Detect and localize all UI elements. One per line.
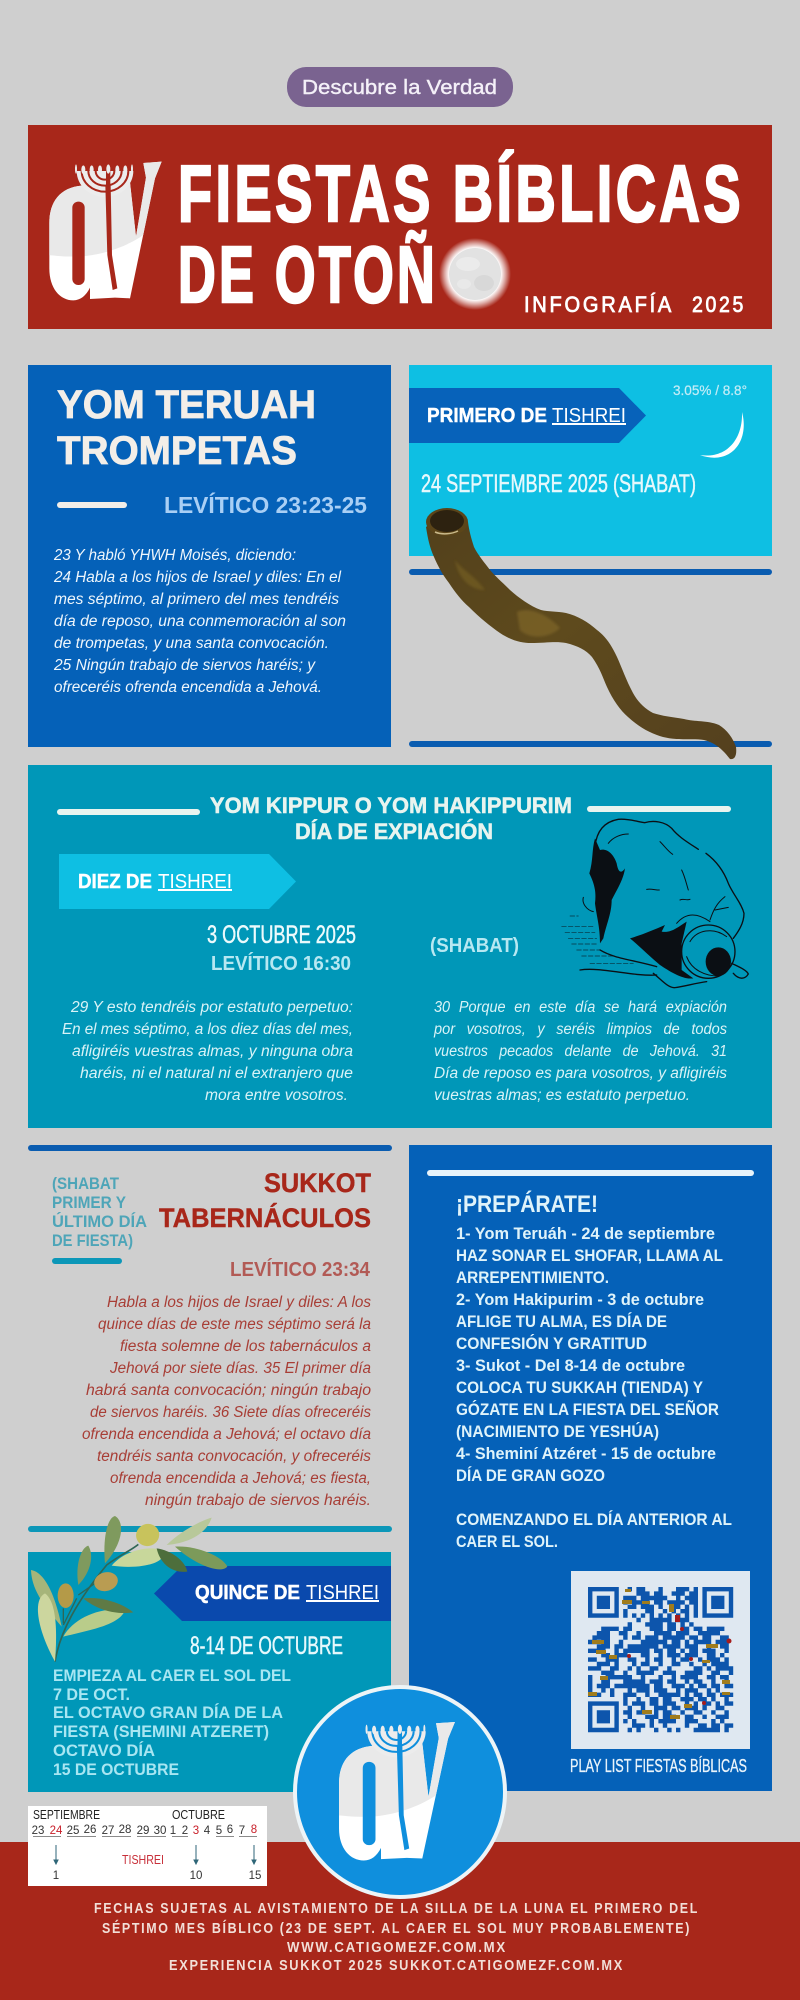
details text: 15 DE OCTUBRE bbox=[53, 1760, 179, 1779]
checklist text: COMENZANDO EL DÍA ANTERIOR AL bbox=[456, 1510, 732, 1529]
calendar: 25 bbox=[67, 1825, 79, 1837]
details text: EL OCTAVO GRAN DÍA DE LA bbox=[53, 1703, 283, 1722]
arrow label: quince de Tishrei: TISHREI bbox=[306, 1582, 379, 1604]
checklist text: DÍA DE GRAN GOZO bbox=[456, 1466, 605, 1485]
heading: Sukkot Tabernáculos bbox=[159, 1168, 371, 1233]
verse text right bbox=[433, 999, 727, 1104]
heading: Yom Teruah Trompetas bbox=[57, 383, 316, 473]
reference: Levítico 23:34: LEVÍTICO 23:34 bbox=[230, 1258, 371, 1281]
calendar: OCTUBRE bbox=[172, 1807, 225, 1822]
calendar: 1 bbox=[53, 1870, 59, 1882]
verse text: quince días de este mes séptimo será la bbox=[98, 1316, 371, 1333]
footer band bbox=[0, 1842, 800, 2000]
footer text: EXPERIENCIA SUKKOT 2025 SUKKOT.CATIGOMEZF.COM.MX bbox=[169, 1957, 624, 1974]
moon data: 3.05% / 8.8° bbox=[673, 382, 747, 398]
arrows bbox=[54, 1845, 256, 1864]
icon: crescent moon bbox=[700, 412, 744, 458]
heading: Sukkot Tabernáculos: SUKKOT bbox=[264, 1168, 371, 1198]
checklist text: CONFESIÓN Y GRATITUD bbox=[456, 1334, 647, 1353]
calendar: TISHREI bbox=[122, 1852, 164, 1867]
heading: Yom Kippur bbox=[210, 793, 572, 844]
badge: Descubre la Verdad: Descubre la Verdad bbox=[302, 77, 497, 99]
reference: Levítico 16:30: LEVÍTICO 16:30 bbox=[211, 952, 351, 975]
checklist text: GÓZATE EN LA FIESTA DEL SEÑOR bbox=[456, 1399, 719, 1419]
note: Shabat primer y último día: (SHABAT bbox=[52, 1175, 119, 1193]
calendar: 10 bbox=[190, 1870, 202, 1882]
section: Sukkot bbox=[52, 1168, 371, 1509]
panel: title banner bbox=[28, 125, 772, 329]
verse text: 24 Habla a los hijos de Israel y diles: En el bbox=[53, 569, 342, 586]
checklist text: 3- Sukot - Del 8-14 de octubre bbox=[456, 1357, 685, 1375]
arrow label: primero de Tishrei bbox=[409, 388, 646, 443]
QR code bbox=[571, 1571, 750, 1749]
icon: full moon bbox=[439, 238, 511, 310]
note: Shabat primer y último día: PRIMER Y bbox=[52, 1194, 126, 1212]
image: shofar horn bbox=[426, 508, 736, 759]
verse text: ningún trabajo de siervos haréis. bbox=[145, 1492, 371, 1509]
heading: Sukkot Tabernáculos: TABERNÁCULOS bbox=[159, 1202, 371, 1233]
verse text: de siervos haréis. 36 Siete días ofreceréis bbox=[90, 1404, 371, 1421]
panel: primero de Tishrei bbox=[409, 365, 772, 556]
calendar: 7 bbox=[239, 1825, 245, 1837]
details text: FIESTA (SHEMINI ATZERET) bbox=[53, 1722, 269, 1741]
checklist text: 2- Yom Hakipurim - 3 de octubre bbox=[456, 1291, 704, 1309]
calendar bbox=[28, 1806, 267, 1886]
verse text: de trompetas, y una santa convocación. bbox=[54, 635, 329, 652]
verse text right: 30 Porque en este día se hará expiación bbox=[434, 999, 727, 1016]
verse text: ofrenda encendida a Jehová; es fiesta, bbox=[110, 1470, 371, 1487]
illustration: man prostrate in prayer bbox=[562, 819, 748, 988]
title: DE OTOÑ bbox=[178, 230, 438, 319]
checklist text: COLOCA TU SUKKAH (TIENDA) Y bbox=[456, 1379, 703, 1397]
illustration: olive branch bbox=[31, 1516, 227, 1662]
icon: logo bbox=[49, 162, 162, 300]
heading: ¡Prepárate!: ¡PREPÁRATE! bbox=[456, 1190, 598, 1218]
verse text: ofreceréis ofrenda encendida a Jehová. bbox=[54, 679, 322, 696]
verse text: 23 Y habló YHWH Moisés, diciendo: bbox=[53, 547, 296, 564]
arrow label: diez de Tishrei bbox=[59, 854, 296, 909]
calendar: 23 bbox=[32, 1825, 44, 1837]
verse text left bbox=[62, 999, 353, 1104]
verse text right: por vosotros, y seréis limpios de todos bbox=[433, 1021, 727, 1038]
panel: prepárate bbox=[409, 1145, 772, 1791]
checklist text: (NACIMIENTO DE YESHÚA) bbox=[456, 1422, 659, 1441]
heading: Yom Kippur: YOM KIPPUR O YOM HAKIPPURIM bbox=[210, 793, 572, 818]
verse text bbox=[82, 1294, 371, 1509]
verse text bbox=[53, 547, 346, 696]
footer text: WWW.CATIGOMEZF.COM.MX bbox=[287, 1939, 507, 1956]
arrow label: quince de Tishrei: QUINCE DE bbox=[195, 1582, 300, 1604]
subtitle: infografía 2025: 2025 bbox=[692, 292, 746, 317]
verse text: ofrenda encendida a Jehová; el octavo día bbox=[82, 1426, 371, 1443]
verse text left: afligiréis vuestras almas, y ninguna obra bbox=[72, 1043, 353, 1060]
arrow label: primero de Tishrei: TISHREI bbox=[552, 405, 626, 427]
verse text: Habla a los hijos de Israel y diles: A los bbox=[107, 1294, 371, 1311]
verse text: Jehová por siete días. 35 El primer día bbox=[109, 1360, 371, 1377]
arrow label: diez de Tishrei: DIEZ DE bbox=[78, 871, 152, 893]
panel: Yom Teruah bbox=[28, 365, 391, 747]
title bbox=[178, 149, 744, 319]
calendar: 26 bbox=[84, 1824, 96, 1836]
verse text: tendréis santa convocación, y ofreceréis bbox=[97, 1448, 371, 1465]
date: 8-14 de octubre: 8-14 DE OCTUBRE bbox=[190, 1632, 343, 1660]
details text bbox=[53, 1666, 291, 1779]
verse text: mes séptimo, al primero del mes tendréis bbox=[54, 591, 339, 608]
verse text right: vuestros pecados delante de Jehová. 31 bbox=[434, 1043, 727, 1060]
checklist text bbox=[456, 1225, 732, 1551]
note: Shabat primer y último día: ÚLTIMO DÍA bbox=[52, 1212, 147, 1231]
calendar: 6 bbox=[227, 1824, 233, 1836]
badge: Descubre la Verdad bbox=[287, 67, 513, 107]
checklist text: 4- Sheminí Atzéret - 15 de octubre bbox=[456, 1445, 716, 1463]
reference: Levítico 23:23-25: LEVÍTICO 23:23-25 bbox=[164, 491, 367, 518]
verse text: habrá santa convocación; ningún trabajo bbox=[86, 1382, 371, 1399]
calendar: 4 bbox=[204, 1825, 211, 1837]
calendar: 1 bbox=[170, 1825, 176, 1837]
checklist text: HAZ SONAR EL SHOFAR, LLAMA AL bbox=[456, 1247, 723, 1265]
arrow label: diez de Tishrei: TISHREI bbox=[158, 871, 232, 893]
arrow label: quince de Tishrei bbox=[154, 1566, 391, 1621]
calendar: 2 bbox=[182, 1825, 188, 1837]
panel: Yom Kippur bbox=[28, 765, 772, 1128]
checklist text: 1- Yom Teruáh - 24 de septiembre bbox=[456, 1225, 715, 1243]
label: Shabat: (SHABAT) bbox=[430, 935, 519, 957]
details text: EMPIEZA AL CAER EL SOL DEL bbox=[53, 1666, 291, 1685]
verse text right: Día de reposo es para vosotros, y afligiréis bbox=[434, 1065, 727, 1082]
verse text: 25 Ningún trabajo de siervos haréis; y bbox=[53, 657, 316, 674]
arrow label: primero de Tishrei: PRIMERO DE bbox=[427, 405, 547, 427]
verse text: día de reposo, una conmemoración al son bbox=[54, 613, 346, 630]
checklist text: AFLIGE TU ALMA, ES DÍA DE bbox=[456, 1312, 667, 1331]
details text: OCTAVO DÍA bbox=[53, 1741, 155, 1760]
calendar: 30 bbox=[154, 1825, 166, 1837]
calendar: 24 bbox=[50, 1825, 63, 1837]
calendar: 15 bbox=[249, 1870, 261, 1882]
footer text: SÉPTIMO MES BÍBLICO (23 DE SEPT. AL CAER EL SOL MUY PROBABLEMENTE) bbox=[102, 1920, 691, 1937]
heading: Yom Teruah Trompetas: YOM TERUAH bbox=[57, 383, 316, 427]
verse text left: haréis, ni el natural ni el extranjero que bbox=[80, 1065, 353, 1082]
verse text left: mora entre vosotros. bbox=[205, 1087, 348, 1104]
calendar: 8 bbox=[251, 1824, 257, 1836]
calendar: 29 bbox=[137, 1825, 149, 1837]
calendar: 3 bbox=[193, 1825, 199, 1837]
calendar: 28 bbox=[119, 1824, 131, 1836]
details text: 7 DE OCT. bbox=[53, 1685, 130, 1704]
calendar: 27 bbox=[102, 1825, 114, 1837]
calendar: 5 bbox=[216, 1825, 222, 1837]
date: 3 octubre 2025: 3 OCTUBRE 2025 bbox=[207, 921, 356, 949]
verse text right: vuestras almas; es estatuto perpetuo. bbox=[434, 1087, 690, 1104]
verse text: fiesta solemne de los tabernáculos a bbox=[120, 1338, 371, 1355]
verse text left: 29 Y esto tendréis por estatuto perpetuo: bbox=[70, 999, 353, 1016]
checklist text: ARREPENTIMIENTO. bbox=[456, 1269, 609, 1287]
note: Shabat primer y último día bbox=[52, 1175, 147, 1250]
note: Shabat primer y último día: DE FIESTA) bbox=[52, 1232, 133, 1250]
heading: Yom Kippur: DÍA DE EXPIACIÓN bbox=[295, 819, 493, 844]
date: 24 SEPTIEMBRE 2025 (SHABAT) bbox=[421, 470, 696, 498]
heading: Yom Teruah Trompetas: TROMPETAS bbox=[57, 429, 297, 473]
panel: quince de Tishrei bbox=[28, 1552, 391, 1792]
checklist text: CAER EL SOL. bbox=[456, 1533, 558, 1551]
calendar: SEPTIEMBRE bbox=[33, 1807, 100, 1822]
footer text bbox=[94, 1900, 699, 1974]
verse text left: En el mes séptimo, a los diez días del mes, bbox=[62, 1021, 353, 1038]
subtitle: infografía 2025: INFOGRAFÍA bbox=[524, 292, 674, 317]
icon: circular logo bbox=[295, 1687, 505, 1897]
